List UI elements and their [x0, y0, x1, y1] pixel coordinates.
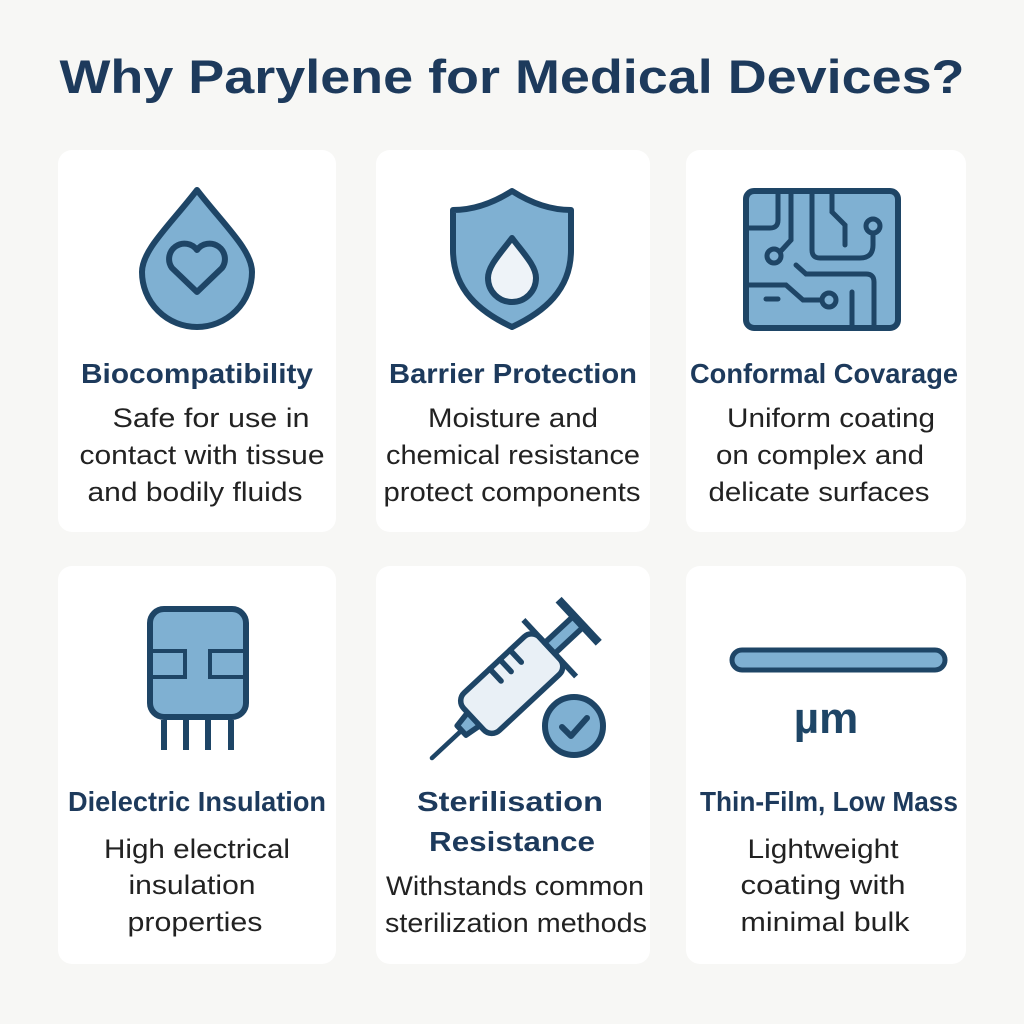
body text: Withstands common: [386, 871, 644, 901]
panel: barrier protection: [376, 150, 650, 532]
body text: [384, 403, 640, 507]
panel: dielectric insulation: [58, 566, 336, 964]
panel: thin-film low mass: [686, 566, 966, 964]
heading: Barrier Protection: [389, 358, 637, 389]
icon: shield with drop: [453, 191, 571, 327]
panel: conformal coverage: [686, 150, 966, 532]
panel: biocompatibility: [58, 150, 336, 532]
body text: delicate surfaces: [708, 477, 930, 507]
body text: Safe for use in: [112, 403, 310, 433]
body text: contact with tissue: [80, 440, 324, 470]
panel: sterilisation resistance: [376, 566, 650, 964]
body text: [385, 871, 647, 938]
body text: [708, 403, 935, 507]
heading: Conformal Covarage: [690, 358, 958, 389]
heading: Dielectric Insulation: [68, 786, 326, 817]
icon: check badge: [545, 697, 603, 755]
body text: minimal bulk: [740, 907, 910, 937]
body text: Moisture and: [428, 403, 598, 433]
icon: drop with heart: [142, 190, 252, 327]
panel: sterilisation resistance: Resistance: [429, 826, 595, 857]
body text: on complex and: [716, 440, 924, 470]
body text: chemical resistance: [386, 440, 640, 470]
heading: Sterilisation: [417, 786, 603, 817]
body text: coating with: [740, 870, 906, 900]
body text: and bodily fluids: [88, 477, 302, 507]
icon: chip: [150, 609, 246, 750]
body text: protect components: [384, 477, 640, 507]
body text: properties: [128, 907, 262, 937]
icon: circuit board: [746, 191, 898, 328]
body text: Lightweight: [748, 834, 899, 864]
body text: insulation: [128, 870, 256, 900]
icon: thin film bar: [732, 650, 945, 670]
heading: Biocompatibility: [81, 358, 313, 389]
body text: High electrical: [104, 834, 290, 864]
body text: sterilization methods: [385, 908, 647, 938]
body text: Uniform coating: [727, 403, 935, 433]
icon: micrometer label: µm: [794, 694, 858, 743]
body text: [104, 834, 290, 937]
heading: Thin-Film, Low Mass: [700, 786, 958, 817]
body text: [80, 403, 324, 507]
body text: [740, 834, 910, 937]
icon: syringe: [406, 593, 605, 786]
title: Why Parylene for Medical Devices?: [60, 50, 964, 103]
